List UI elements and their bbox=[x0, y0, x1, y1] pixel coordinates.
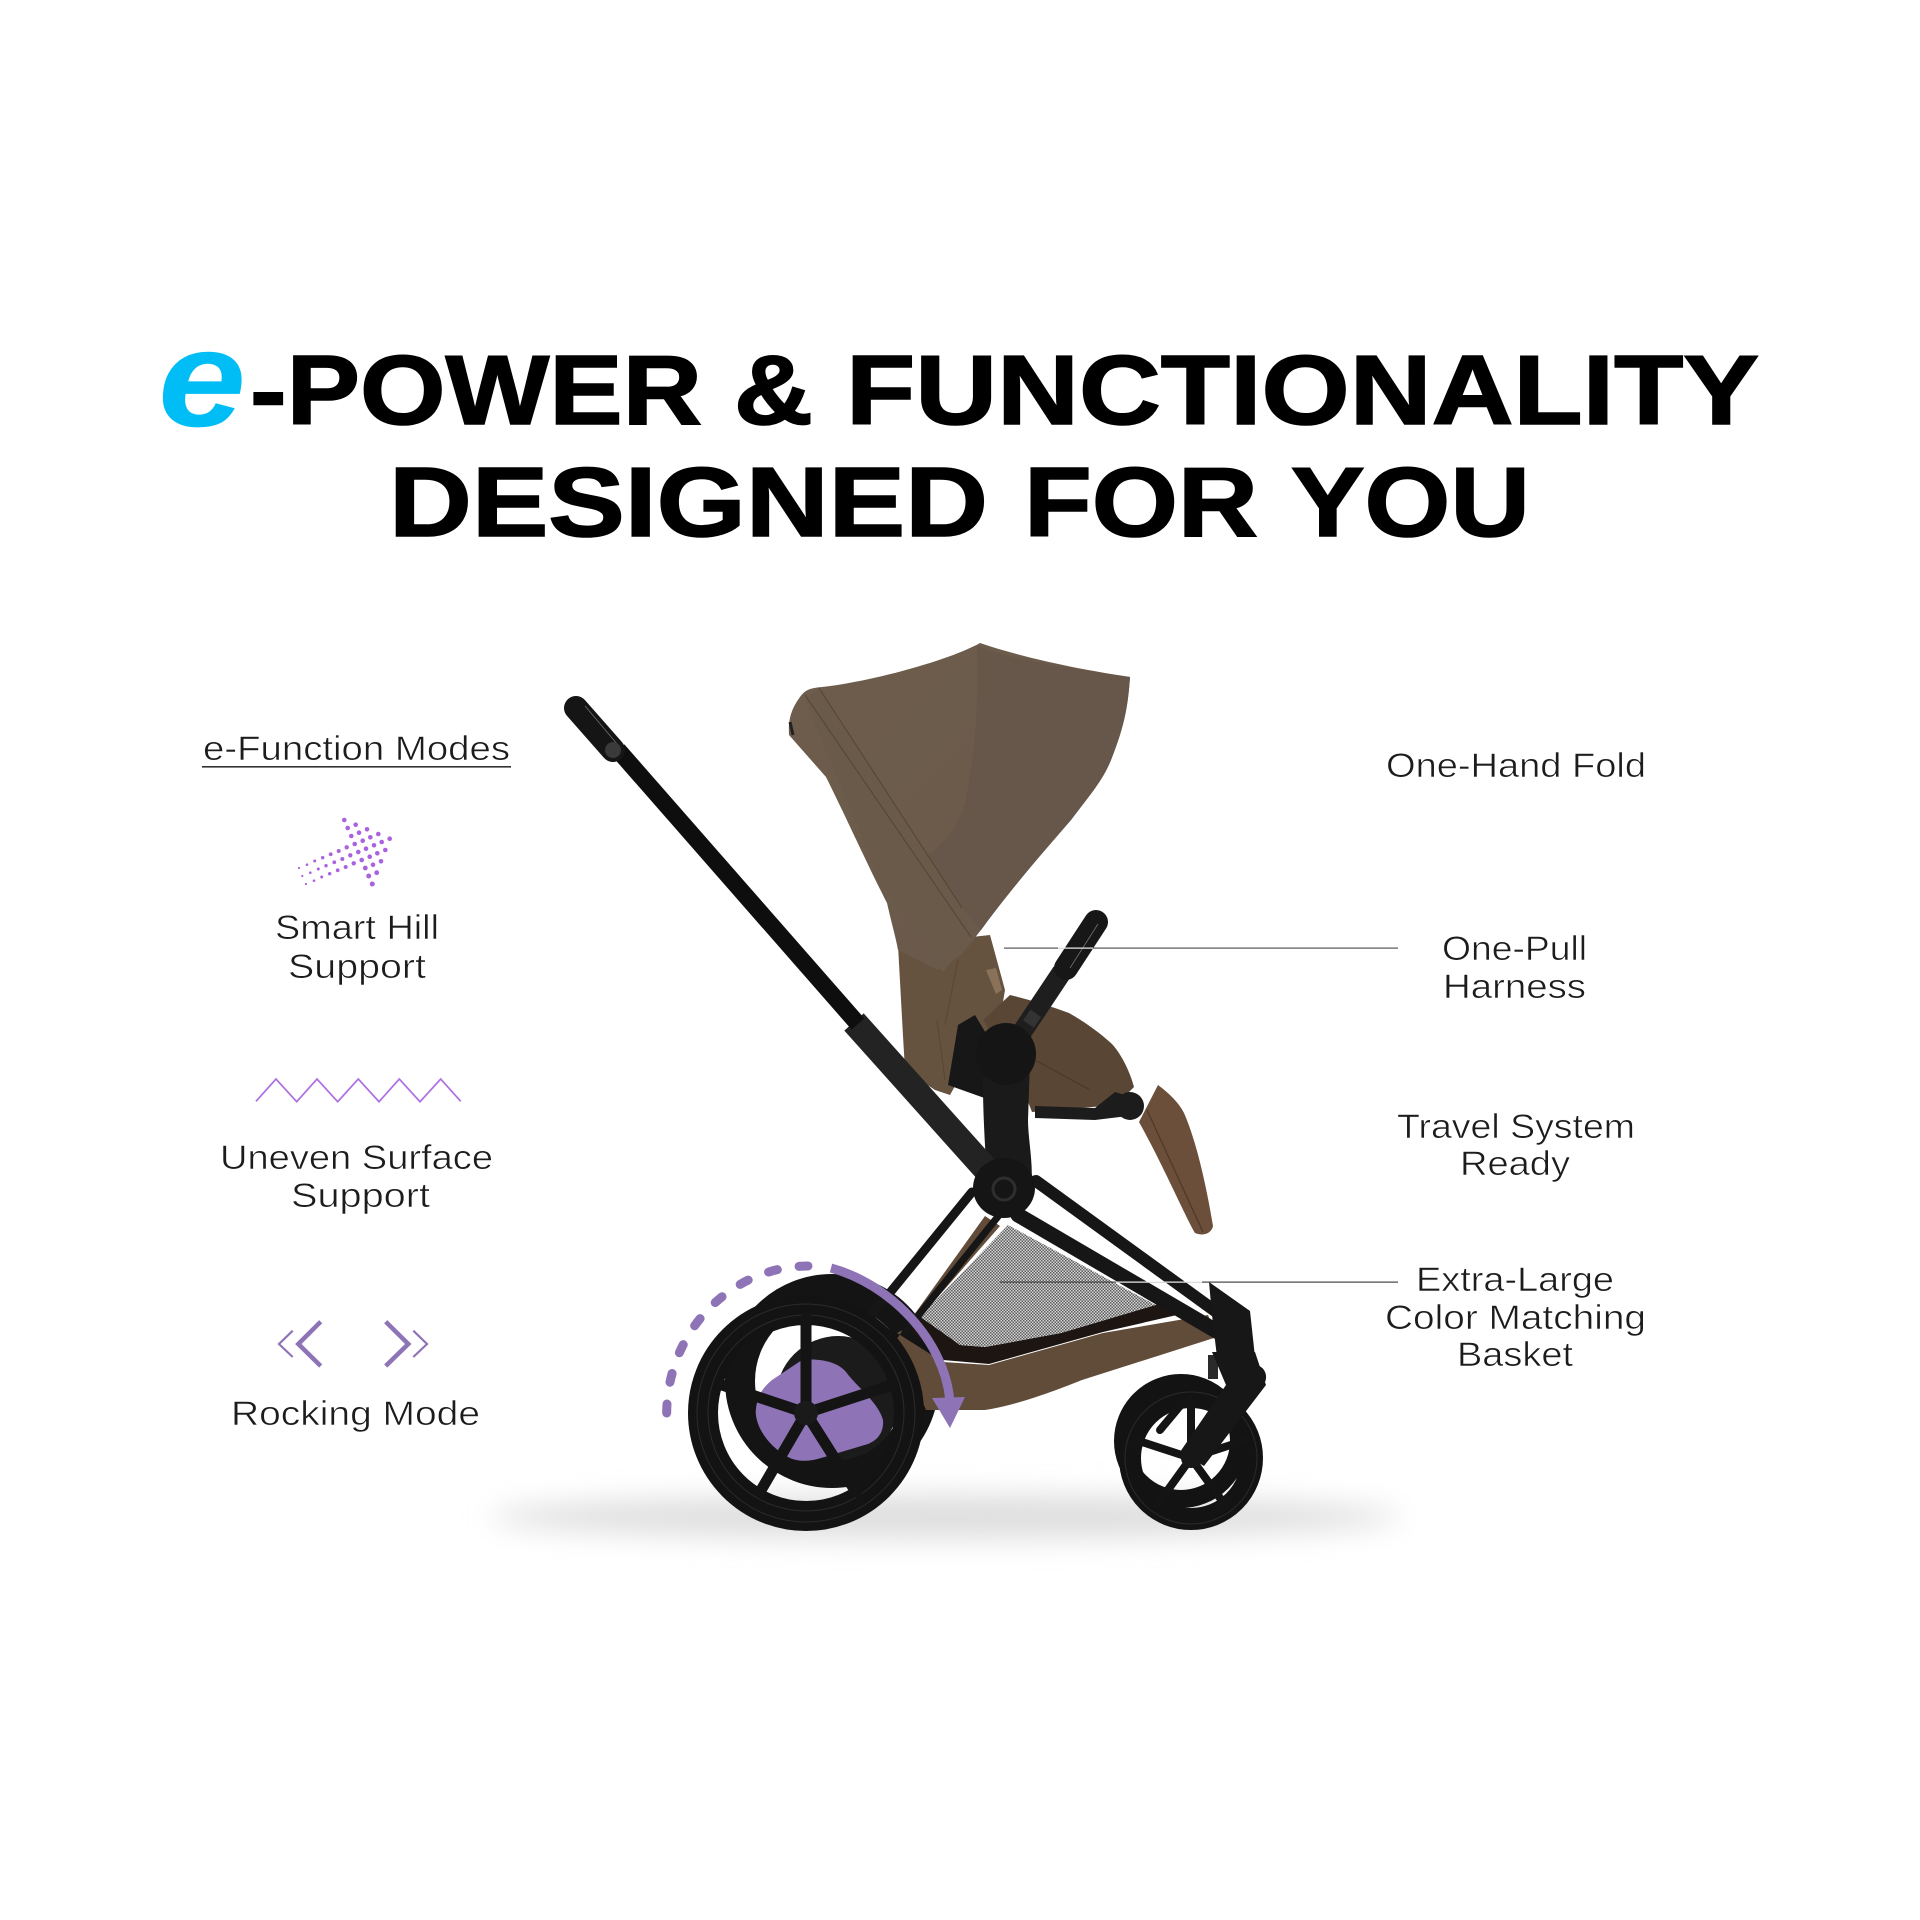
rear wheel bbox=[697, 1304, 915, 1522]
label: Smart Hill Support bbox=[275, 909, 439, 986]
rocking motion arrow bbox=[667, 1266, 965, 1428]
front fork bbox=[1180, 1282, 1266, 1468]
seat adapter bracket bbox=[948, 1015, 990, 1100]
label: One-Pull Harness bbox=[1442, 930, 1587, 1006]
seat base bbox=[983, 995, 1134, 1112]
lower pivot bbox=[973, 1158, 1035, 1218]
seat pivot bbox=[976, 1023, 1036, 1085]
label: Smart Hill Support: Support bbox=[288, 948, 427, 986]
label: Extra-Large Color Matching Basket bbox=[1385, 1261, 1646, 1374]
basket fabric bbox=[896, 1216, 1217, 1410]
label: Uneven Surface Support: Support bbox=[291, 1177, 431, 1215]
far rear wheel bbox=[740, 1289, 924, 1473]
basket bbox=[896, 1216, 1217, 1410]
front armrest handle bbox=[1010, 922, 1098, 1050]
title line 2: DESIGNED bbox=[389, 447, 988, 557]
label: Extra-Large Color Matching Basket: Basket bbox=[1457, 1336, 1574, 1374]
label: One-Pull Harness: One-Pull bbox=[1442, 930, 1587, 968]
logo letter e: e bbox=[158, 302, 246, 456]
callout line: one-pull harness bbox=[1004, 948, 1398, 949]
label: One-Hand Fold: One-Hand Fold bbox=[1386, 747, 1646, 785]
panel: feature labels bbox=[1385, 747, 1646, 1374]
front wheel bbox=[1123, 1383, 1257, 1524]
lower handlebar tube bbox=[854, 1022, 1000, 1185]
heading: e-Function Modes: e-Function Modes bbox=[203, 730, 510, 768]
seat bbox=[937, 960, 1144, 1120]
frame tubes bbox=[871, 1181, 1222, 1332]
handlebar grip bbox=[576, 708, 613, 750]
label: Travel System Ready bbox=[1397, 1108, 1635, 1183]
basket dark trim bbox=[905, 1303, 1190, 1364]
harness strap bbox=[986, 968, 1002, 994]
title line 1: -POWER bbox=[250, 335, 702, 445]
ground shadow bbox=[490, 1495, 1400, 1539]
title line 1: FUNCTIONALITY bbox=[846, 335, 1759, 445]
label: Uneven Surface Support: Uneven Surface bbox=[220, 1139, 493, 1177]
title line 2: FOR bbox=[1024, 447, 1258, 557]
icon: dotted arrow bbox=[298, 818, 392, 886]
canopy fold band bbox=[805, 688, 971, 972]
label: Extra-Large Color Matching Basket: Color Matching bbox=[1385, 1299, 1646, 1337]
title line 2 bbox=[389, 447, 1530, 557]
label: Extra-Large Color Matching Basket: Extra-Large bbox=[1416, 1261, 1614, 1299]
canopy bbox=[789, 643, 1130, 972]
label: One-Pull Harness: Harness bbox=[1443, 968, 1586, 1006]
seat footrest link bbox=[1035, 1092, 1128, 1120]
title bbox=[158, 302, 1759, 557]
label: Travel System Ready: Ready bbox=[1460, 1145, 1570, 1183]
title line 2: YOU bbox=[1291, 447, 1530, 557]
stroller bbox=[576, 643, 1266, 1524]
title line 1 bbox=[250, 335, 1759, 445]
footrest bbox=[1139, 1085, 1213, 1234]
label: Travel System Ready: Travel System bbox=[1397, 1108, 1635, 1146]
seat back bbox=[898, 935, 1005, 1095]
label: Smart Hill Support: Smart Hill bbox=[275, 909, 439, 947]
label: Rocking Mode: Rocking Mode bbox=[231, 1395, 480, 1433]
callout line: basket bbox=[1000, 1282, 1398, 1283]
panel: e-function modes bbox=[202, 730, 511, 1433]
canopy right panel bbox=[928, 646, 1130, 930]
dashed arc bbox=[667, 1266, 808, 1424]
upper handlebar tube bbox=[618, 750, 858, 1024]
solid arc bbox=[831, 1268, 950, 1402]
arrow head bbox=[932, 1397, 965, 1428]
label: Uneven Surface Support bbox=[220, 1139, 493, 1215]
basket mesh bbox=[920, 1225, 1156, 1347]
handlebar bbox=[576, 706, 1000, 1185]
icon: zigzag line bbox=[256, 1079, 461, 1102]
purple wheel hub highlight bbox=[756, 1360, 883, 1461]
seat column bbox=[983, 1060, 1032, 1190]
icon: rocking chevrons bbox=[279, 1322, 427, 1366]
title line 1: & bbox=[734, 335, 813, 445]
